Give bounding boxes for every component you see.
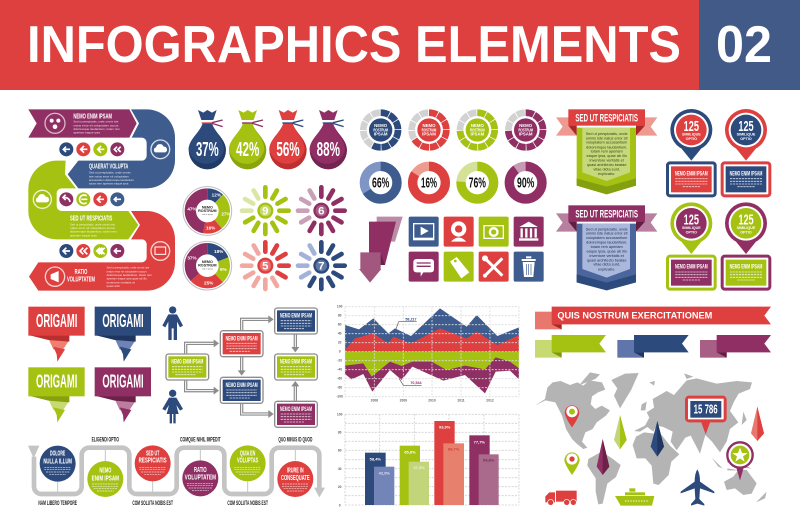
blue step — [68, 109, 175, 188]
timeline labels: NAM LIBERO TEMPORE — [38, 501, 77, 507]
crystal marker: purple — [597, 439, 609, 475]
ribbon card: blue — [556, 205, 657, 290]
purple ribbon step — [28, 109, 137, 138]
step: Irure in consequate — [277, 461, 313, 497]
chart axis labels: 100 — [337, 305, 343, 309]
icon: tools — [479, 252, 509, 282]
timeline labels: QUO MINUS ID QUOD — [278, 437, 313, 443]
pin 125: green and purple: 125 — [684, 212, 699, 228]
origami tag: green — [28, 367, 85, 422]
bar chart axis labels: 80 — [338, 431, 342, 435]
origami tag: navy — [95, 307, 151, 362]
segmented ring: purple: ROSTRUM — [518, 127, 533, 132]
donut: 76%: 76% — [469, 176, 486, 192]
green step: Sed ut perspiciatis, unde omnis iste — [70, 222, 115, 226]
panel: origami tags and flowchart — [28, 306, 317, 427]
step: Ratio voluptatem: RATIO — [194, 465, 207, 474]
bars: red group: 68,7% — [448, 447, 460, 452]
blue step: iste natus error sit voluptatem — [89, 174, 130, 178]
red step: inventore veritatis et — [107, 280, 135, 284]
chart axis labels — [336, 305, 494, 403]
flow box: red — [220, 331, 263, 357]
blue step: QUAERAT VOLUPTA — [89, 164, 128, 171]
step: Sed ut respiciatis: SED UT — [146, 448, 159, 457]
bars: green group — [400, 446, 429, 505]
segmented pie 2: 9% — [220, 267, 228, 272]
pin box: green on purple — [721, 255, 771, 291]
bar chart — [337, 413, 519, 507]
map pin: red — [565, 405, 579, 427]
segmented pie 2: ROSTRUM — [198, 264, 217, 268]
pin 125: navy and red — [670, 109, 712, 161]
chart axis labels: 80 — [338, 314, 342, 318]
radial counter: 6 — [298, 187, 345, 234]
callout: 70,544 — [399, 378, 423, 385]
ribbon: title: QUIS NOSTRUM EXERCITATIONEM — [557, 310, 713, 320]
pin 125: green and purple: OPTIO — [686, 230, 697, 234]
arrow buttons row 3 — [59, 244, 124, 258]
arrow buttons row 1 — [59, 142, 124, 156]
callout: 58,217 — [396, 318, 417, 329]
segmented pie 1: 12% — [212, 192, 222, 197]
icon: speech bubble — [409, 252, 439, 282]
segmented pie 1: 27% — [221, 212, 232, 217]
step: Dolore nulla illum: DOLORE — [50, 448, 65, 457]
ribbon card: green: explicabo. — [598, 172, 615, 176]
bar chart axis labels: 40 — [338, 467, 342, 471]
red step: Sed ut perspiciatis, unde omnis iste — [107, 266, 150, 270]
bar chart axis labels — [337, 413, 343, 507]
bar chart axis labels: 20 — [338, 485, 342, 489]
flow box: purple — [275, 401, 317, 427]
chart axis labels: 2010 — [428, 399, 436, 403]
purple ribbon step: aperiam eaque ipsa — [73, 131, 100, 135]
panel: ribbons and pins — [556, 109, 771, 291]
money bag: 56% — [269, 110, 307, 169]
bar chart axis labels: 100 — [337, 413, 343, 417]
chart axis labels: 20 — [338, 341, 342, 345]
segmented pie 2: sed ut persp — [202, 268, 214, 271]
green step: SED UT RESPICIATIS — [70, 216, 113, 223]
map pin: star — [727, 442, 753, 480]
ribbon card: green: omnis iste natus error sit — [586, 136, 628, 140]
step: Quia en voluptas: VOLUPTAS — [237, 456, 258, 465]
chart axis labels: 2008 — [371, 399, 378, 403]
money bag: 88% — [310, 110, 347, 169]
chart axis labels: 2009 — [400, 399, 407, 403]
ribbon card: green: Sed ut perspiciatis, unde — [586, 132, 628, 136]
step: Dolore nulla illum — [40, 446, 76, 482]
flow box: start — [166, 354, 209, 380]
timeline track — [28, 446, 325, 497]
panel: snake process — [28, 109, 347, 291]
pin box: red on navy: NEMO ENIM IPSAM — [675, 170, 708, 177]
segmented pie 2: 18% — [214, 249, 224, 254]
segmented pie 1: 47% — [187, 207, 198, 212]
bars: red group — [434, 421, 464, 505]
flow box: navy top: NEMO ENIM IPSAM — [280, 313, 312, 320]
blue step: Sed ut perspiciatis, unde omnis — [89, 171, 131, 175]
icon: airplane — [681, 469, 714, 506]
ribbon card: blue: totam rem aperiam — [591, 245, 623, 249]
segmented pie 1: ROSTRUM — [198, 209, 217, 213]
flow box: green right: NEMO ENIM IPSAM — [280, 359, 312, 366]
timeline labels — [38, 437, 313, 507]
step: Quia en voluptas — [230, 445, 266, 481]
segmented ring: green: NEMO — [471, 123, 484, 128]
segmented pie 2: NEMO — [202, 260, 213, 264]
money bag: 42% — [229, 110, 266, 169]
step: Sed ut respiciatis: RESPICIATIS — [139, 456, 167, 465]
segmented ring: red: ROSTRUM — [422, 127, 437, 132]
flow box: navy top — [275, 308, 317, 334]
pin box: red on navy — [666, 161, 717, 197]
flow box: navy middle — [220, 377, 263, 403]
segmented ring: green: ROSTRUM — [470, 127, 485, 132]
segmented pie 1: sed ut persp — [202, 213, 214, 216]
donut: 66%: 66% — [372, 176, 389, 192]
green step — [28, 161, 138, 239]
radial counter: 5 — [242, 242, 289, 289]
panel: rings, donuts and icons — [359, 113, 544, 283]
segmented ring: navy: ROSTRUM — [373, 127, 388, 132]
chart axis labels: -20 — [337, 359, 342, 363]
icon: tag — [444, 252, 474, 282]
header banner — [0, 0, 800, 90]
ribbon card: green: doloremque laudantium, — [586, 145, 627, 149]
segmented ring: red — [412, 113, 446, 147]
origami tag: green: ORIGAMI — [36, 371, 77, 392]
pin box: purple on green: NEMO ENIM IPSAM — [675, 264, 708, 271]
pin 125: purple and green: 125 — [738, 212, 754, 228]
flow box: start: NEMO ENIM IPSAM — [171, 359, 203, 366]
donut: 90% — [509, 166, 542, 199]
callout: 58,217: 58,217 — [405, 318, 417, 322]
pin box: navy on red — [721, 161, 771, 197]
pin 125: red and navy: OPTIO — [740, 137, 752, 141]
flow box: red: NEMO ENIM IPSAM — [226, 335, 258, 342]
red step: aperiam eaque ipsa quae ab illo — [107, 277, 147, 281]
bars: red group: 93,9% — [439, 424, 451, 429]
callout: 70,544: 70,544 — [410, 381, 423, 385]
bar chart axis labels: 60 — [338, 449, 342, 453]
panel: ribbons and world map — [535, 307, 771, 506]
ribbon: purple — [700, 335, 771, 358]
ribbon card: blue: quasi architecto beatae — [587, 258, 626, 262]
pin 125: red and navy: 125 — [738, 119, 754, 135]
bars: purple group: 54,8% — [483, 458, 495, 463]
donut: 66% — [364, 166, 397, 199]
icon: woman — [162, 390, 183, 423]
segmented ring: red: NEMO — [422, 123, 436, 128]
icon: trash — [514, 252, 544, 282]
timeline labels: COM SOLUTA NOBIS EST — [132, 501, 173, 507]
radial counter: 9: 9 — [262, 206, 268, 218]
radial counter: 6: 6 — [318, 206, 324, 218]
origami tag: navy: ORIGAMI — [102, 310, 144, 331]
pin 125: navy and red: 125 — [684, 119, 699, 135]
icon: camera — [479, 217, 509, 247]
bars: navy group: 58,4% — [370, 457, 381, 462]
title: INFOGRAPHICS ELEMENTS — [27, 16, 681, 74]
segmented ring: purple: IPSAM — [519, 132, 533, 137]
flow box: purple: NEMO ENIM IPSAM — [280, 406, 312, 413]
ribbon card: green — [556, 109, 657, 194]
ribbon: green — [535, 335, 606, 358]
red step: natus error sit voluptatem accus — [107, 269, 147, 273]
purple ribbon step: doloremque laudantium, totam rem — [73, 127, 121, 131]
pin box: purple on green — [666, 255, 717, 291]
map pin: green — [564, 452, 580, 475]
bars: navy group — [365, 453, 394, 505]
issue number: 02 — [716, 16, 772, 74]
step: Irure in consequate: IRURE IN — [287, 465, 304, 474]
step: Nemo enim ipsam: NEMO — [99, 465, 111, 474]
pin 125: purple and green — [725, 202, 767, 254]
ribbon card: blue: Sed ut perspiciatis, unde — [586, 227, 628, 231]
pin 125: green and purple: SIMILIQUE — [682, 226, 701, 230]
timeline labels: COMQUE NIHIL IMPEDIT — [180, 437, 221, 443]
ribbon card: green: voluptatem accusantium — [586, 141, 627, 145]
radial counter: 9 — [242, 187, 289, 234]
bars: green group: 65,8% — [404, 450, 416, 455]
flow box: navy middle: NEMO ENIM IPSAM — [226, 382, 258, 389]
counter callout: 15 786 — [685, 396, 727, 434]
pin 125: purple and green: OPTIO — [740, 230, 752, 234]
red step: doloremque laudantium, totam rem — [107, 273, 152, 277]
pin box: green on purple: NEMO ENIM IPSAM — [730, 264, 763, 271]
origami tag: purple: ORIGAMI — [102, 371, 144, 392]
bars: green group: 47,5% — [413, 465, 425, 470]
step: Dolore nulla illum: NULLA ILLUM — [43, 456, 72, 465]
chart axis labels: -60 — [337, 377, 342, 381]
red step: VOLUPTATEM — [67, 276, 95, 283]
ribbon card: blue: doloremque laudantium, — [586, 241, 627, 245]
origami tag: red — [28, 307, 85, 362]
donut: 76% — [461, 166, 494, 199]
step: Quia en voluptas: QUIA EN — [240, 448, 256, 457]
chart axis labels: -100 — [336, 395, 343, 399]
world map — [535, 372, 767, 504]
panel: timeline path — [28, 437, 325, 507]
origami tag: red: ORIGAMI — [36, 310, 77, 331]
icon: truck — [545, 491, 577, 505]
icon: man — [162, 306, 183, 340]
segmented ring: purple — [508, 113, 543, 147]
flow arrows — [186, 315, 299, 418]
chart axis labels: 0 — [339, 350, 341, 354]
blue step: accusantium doloremque laudantium — [89, 178, 134, 182]
donut: 90%: 90% — [517, 176, 534, 192]
ribbon card: green: quasi architecto beatae — [587, 163, 626, 167]
donut: 16% — [413, 166, 445, 199]
step: Sed ut respiciatis — [135, 445, 171, 481]
ribbon card: blue: vitae dicta sunt, — [593, 263, 620, 267]
bars: purple group — [469, 435, 499, 505]
ribbon card: green: SED UT RESPICIATIS — [575, 112, 638, 124]
ribbon card: green: inventore veritatis et — [590, 159, 625, 163]
radial counter: 7: 7 — [318, 261, 324, 273]
ribbon card: blue: voluptatem accusantium — [586, 236, 627, 240]
purple ribbon step: Sed ut perspiciatis, unde omnis iste — [73, 120, 119, 124]
blue step: totam rem aperiam eaque ipsa — [89, 182, 129, 186]
red step: RATIO — [75, 269, 88, 276]
segmented pie 1 — [183, 187, 232, 235]
green step: natus error sit voluptatem accus — [70, 226, 116, 230]
segmented ring: green — [460, 113, 495, 147]
segmented pie 2: 25% — [204, 280, 214, 285]
chart axis labels: 2011 — [457, 399, 465, 403]
step: Ratio voluptatem: VOLUPTATEM — [185, 473, 216, 482]
money bag: 88%: 88% — [317, 139, 340, 161]
purple ribbon step: NEMO ENIM IPSAM — [73, 113, 112, 120]
chart axis labels: -40 — [337, 368, 342, 372]
ribbon card: green: eaque ipsa, quae ab illo — [586, 154, 627, 158]
pin 125: red and navy — [725, 109, 767, 161]
ribbon card: green: vitae dicta sunt, — [593, 167, 620, 171]
pin 125: purple and green: SIMILIQUE — [737, 226, 756, 230]
segmented pie 2: 37% — [187, 256, 198, 261]
ribbon card: blue: omnis iste natus error sit — [586, 232, 628, 236]
ribbon card: blue: SED UT RESPICIATIS — [575, 208, 638, 220]
segmented ring: navy: NEMO — [374, 123, 388, 128]
timeline labels: ELIGENDI OPTIO — [92, 438, 119, 444]
crystal marker: green — [614, 415, 627, 449]
pin 125: green and purple — [670, 202, 712, 254]
crystal marker: red — [751, 407, 764, 441]
segmented ring: red: IPSAM — [422, 132, 436, 137]
icon: ship — [615, 488, 654, 506]
chart axis labels: 60 — [338, 323, 342, 327]
ribbon card: blue: eaque ipsa, quae ab illo — [586, 249, 627, 253]
radial counter: 7 — [298, 242, 345, 289]
icon: webcam — [444, 217, 474, 247]
origami tag: purple — [95, 367, 151, 422]
icon: video — [409, 217, 439, 247]
flow box: green right — [275, 354, 317, 380]
segmented ring: navy — [363, 113, 398, 147]
arrow buttons row 2 — [59, 192, 124, 206]
chart axis labels: 2012 — [486, 399, 494, 403]
pin 125: navy and red: SIMILIQUE — [682, 133, 701, 137]
step: Irure in consequate: CONSEQUATE — [281, 473, 310, 482]
segmented ring: navy: IPSAM — [374, 132, 388, 137]
counter callout: 15 786: 15 786 — [694, 402, 718, 417]
red step — [29, 211, 175, 291]
chart axis labels: -80 — [337, 386, 342, 390]
icon: bank — [514, 217, 544, 247]
pin 125: navy and red: OPTIO — [686, 137, 697, 141]
green step: doloremque laudantium, totam rem — [70, 230, 117, 234]
step: Nemo enim ipsam: ENIM IPSAM — [92, 473, 119, 482]
bar chart axis labels: 0 — [339, 503, 341, 507]
segmented pie 1: 16% — [206, 225, 216, 230]
step: Nemo enim ipsam — [87, 461, 123, 497]
ribbon: title — [535, 307, 771, 329]
money bag: 42%: 42% — [236, 139, 259, 161]
timeline labels: COM SOLUTA NOBIS EST — [227, 501, 268, 507]
area chart — [336, 305, 519, 403]
segmented pie 1: NEMO — [202, 205, 213, 209]
segmented pie 2 — [183, 241, 232, 290]
ribbon card: blue: inventore veritatis et — [590, 254, 625, 258]
chart axis labels: 40 — [338, 332, 342, 336]
pin 125: red and navy: SIMILIQUE — [737, 133, 756, 137]
bars: navy group: 42,0% — [379, 470, 390, 475]
ribbon card: blue: explicabo. — [598, 267, 615, 271]
segmented ring: purple: NEMO — [519, 123, 533, 128]
purple ribbon step: natus error sit voluptatem accus — [73, 123, 119, 127]
pin box: navy on red: NEMO ENIM IPSAM — [730, 170, 763, 177]
step: Ratio voluptatem — [182, 460, 218, 496]
green step: aperiam eaque ipsa — [70, 233, 97, 237]
ribbon: navy — [617, 335, 689, 358]
segmented ring: green: IPSAM — [470, 132, 485, 137]
donut: 16%: 16% — [421, 176, 437, 192]
folded arrow — [359, 217, 403, 283]
ribbon card: green: totam rem aperiam — [591, 150, 623, 154]
money bag: 37% — [189, 110, 226, 169]
money bag: 37%: 37% — [196, 139, 219, 161]
radial counter: 5: 5 — [262, 261, 268, 273]
red step: quasi arch — [107, 284, 120, 288]
money bag: 56%: 56% — [276, 139, 300, 161]
crystal marker: navy — [651, 421, 664, 457]
bars: purple group: 77,7% — [474, 439, 485, 444]
